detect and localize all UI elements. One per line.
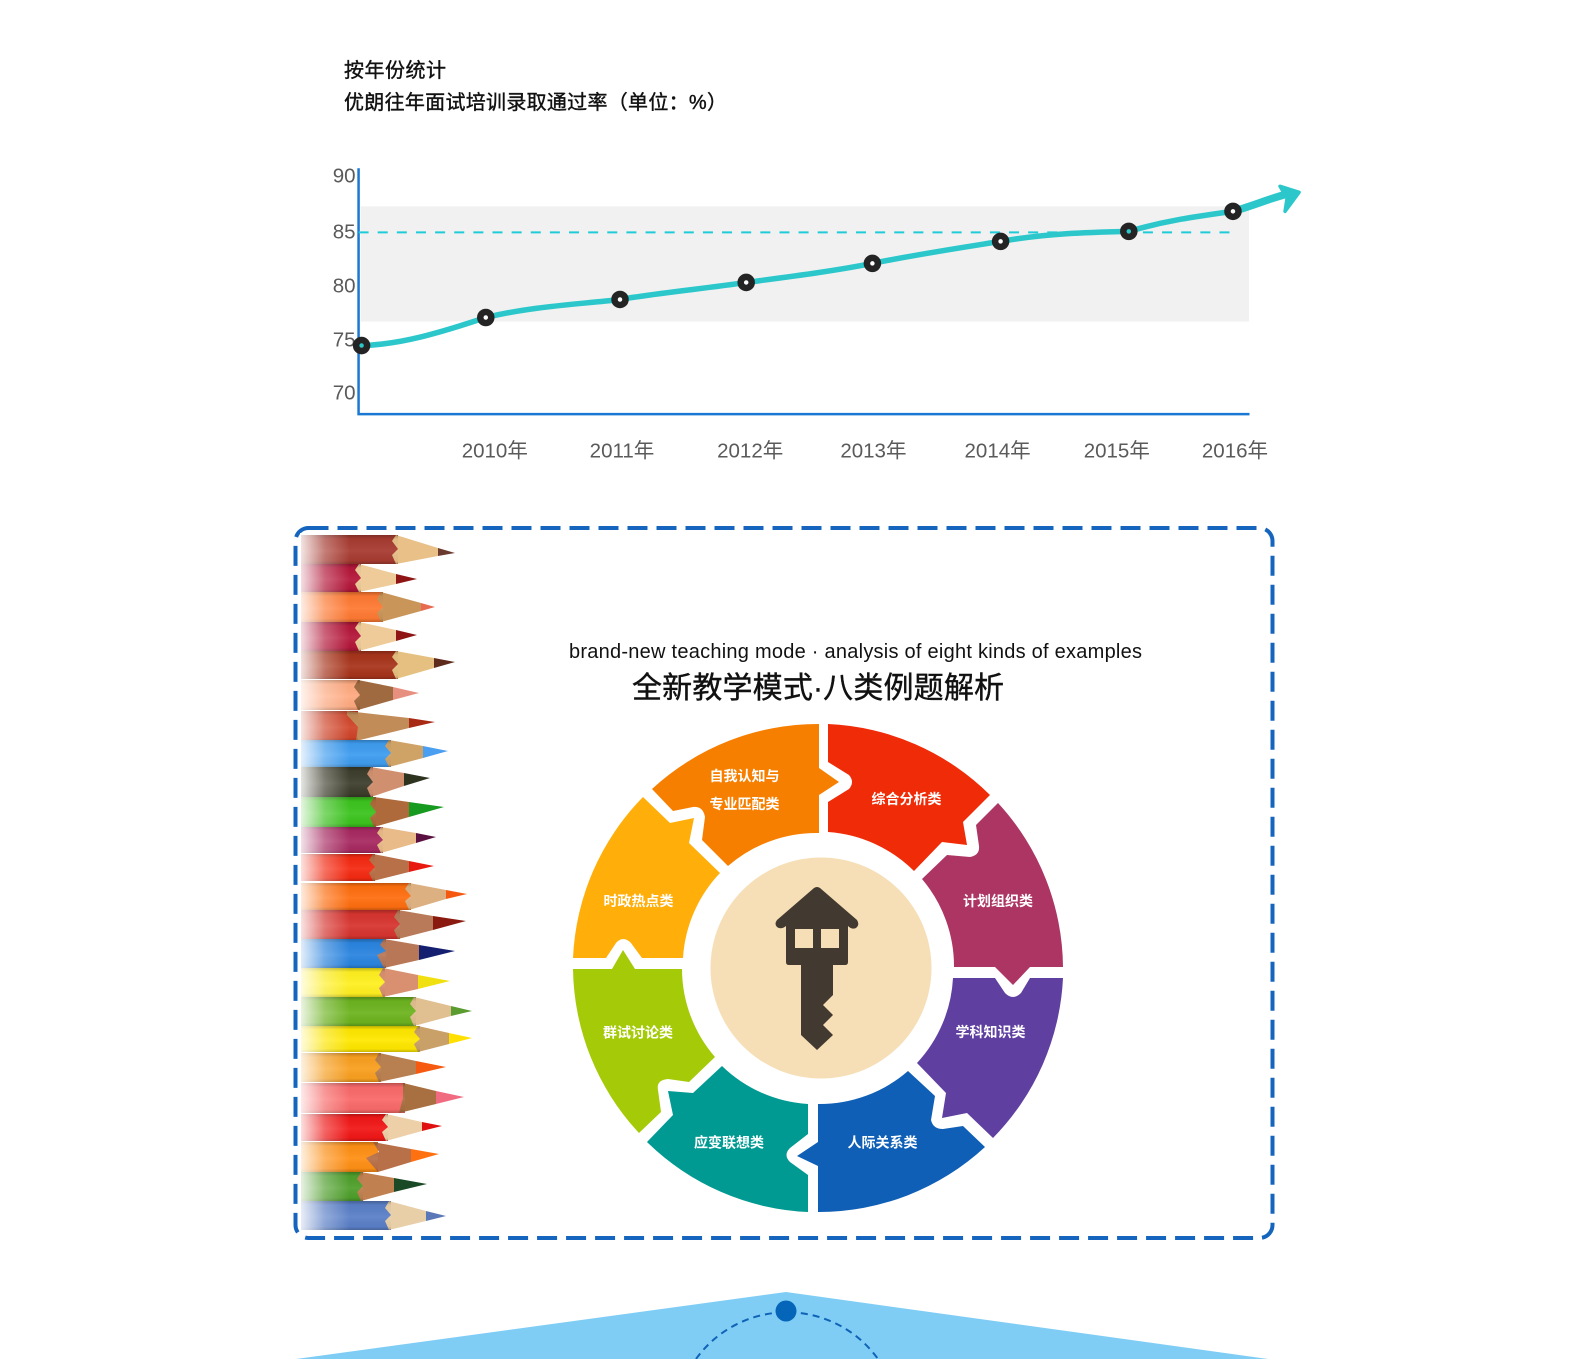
y axis labels: 70 [333,382,356,405]
heading: chinese title: 全新教学模式·八类例题解析 [632,672,1004,705]
heading: chart title: 优朗往年面试培训录取通过率（单位：%） [344,91,727,114]
y axis labels [333,164,356,405]
y axis labels: 85 [333,220,356,243]
orbit dot [776,1300,796,1322]
segment: self-knowledge: 自我认知与 [710,768,780,784]
segment: planning: 计划组织类 [963,893,1033,909]
y axis labels: 90 [333,164,356,187]
segment: group discussion [573,950,715,1133]
segment: group discussion: 群试讨论类 [603,1024,673,1040]
bottom section: roof shape [296,1292,1268,1359]
segment: comprehensive analysis: 综合分析类 [872,791,942,807]
dashed orbit [696,1312,878,1359]
segment: comprehensive analysis [828,724,990,871]
reference line at 85 [359,231,1234,233]
segment: subject knowledge [917,978,1063,1138]
data points [356,206,1238,351]
heading: chart title: 按年份统计 [344,59,446,82]
segment: subject knowledge: 学科知识类 [956,1024,1026,1040]
segment: self-knowledge [652,724,839,866]
centre disc [710,858,932,1078]
illustration: coloured pencils [300,533,472,1231]
icon: house key [776,887,858,1050]
pencil fade [300,533,350,1231]
wheel: eight example types [573,724,1063,1212]
x axis labels: 2012年 [717,440,783,463]
segment: planning [922,803,1063,985]
y axis labels: 80 [333,274,356,297]
panel: dashed frame [296,528,1272,1238]
x axis labels: 2014年 [965,440,1031,463]
x axis labels: 2010年 [462,440,528,463]
x axis labels: 2016年 [1202,440,1268,463]
segment: current affairs [573,797,720,958]
segment: interpersonal [797,1071,985,1212]
chart axes [359,168,1249,414]
x axis labels: 2013年 [840,440,906,463]
segment: adaptive association: 应变联想类 [694,1134,764,1150]
x axis labels: 2015年 [1084,440,1150,463]
chart band: 77 to 87 range [361,206,1249,322]
y axis labels: 75 [333,329,356,352]
x axis labels: 2011年 [590,440,654,463]
segment: current affairs: 时政热点类 [604,893,674,909]
line chart: pass rate by year [333,164,1299,463]
segment: interpersonal: 人际关系类 [848,1134,918,1150]
heading: chart title [344,59,727,114]
heading: english subtitle: brand-new teaching mode · analysis of eight kinds of examples [569,641,1142,663]
segment: adaptive association [647,1066,808,1212]
x axis labels [462,440,1268,463]
segment: self-knowledge: 专业匹配类 [710,796,780,812]
trend line with arrow [362,186,1299,346]
